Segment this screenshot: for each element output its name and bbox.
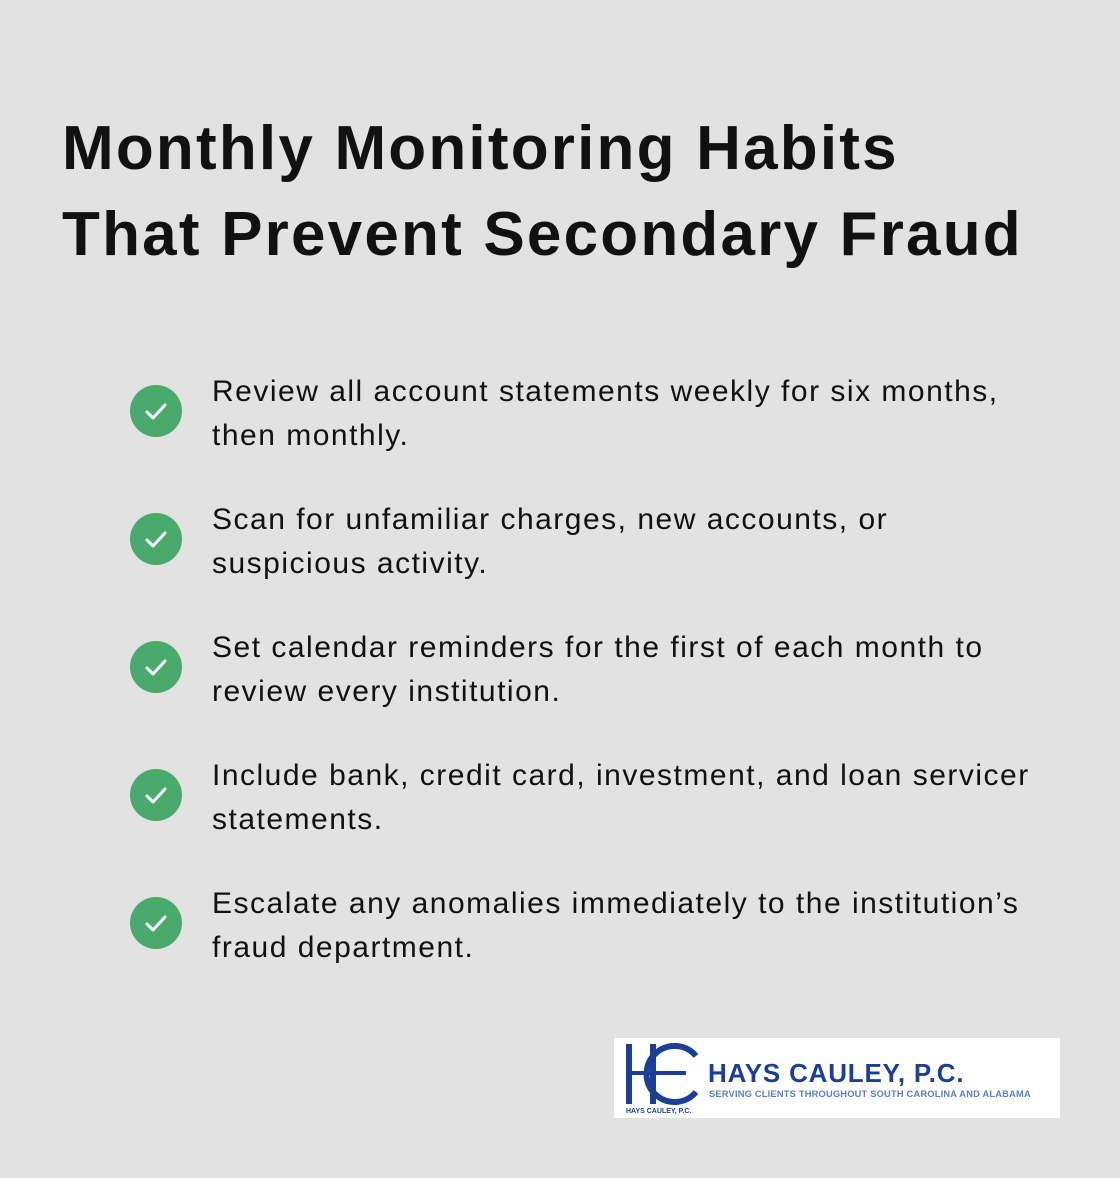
- text: [212, 759, 1030, 836]
- logo mark: [626, 1043, 698, 1105]
- icon: check: [130, 897, 182, 949]
- text: [212, 631, 984, 708]
- item 5: [130, 887, 1019, 964]
- item 3: [130, 631, 984, 708]
- title: Monthly Monitoring Habits: [62, 114, 899, 183]
- text: [212, 503, 888, 580]
- text: review every institution.: [212, 675, 561, 708]
- logo: HAYS CAULEY, P.C.: [626, 1108, 691, 1115]
- icon: check: [130, 641, 182, 693]
- text: Set calendar reminders for the first of each month to: [212, 631, 984, 664]
- text: statements.: [212, 803, 384, 836]
- icon: check: [130, 385, 182, 437]
- logo name: HAYS CAULEY, P.C.: [708, 1058, 964, 1088]
- text: Scan for unfamiliar charges, new accounts, or: [212, 503, 888, 536]
- item 2: [130, 503, 888, 580]
- logo: [614, 1038, 1060, 1118]
- text: fraud department.: [212, 931, 474, 964]
- text: [212, 375, 999, 452]
- text: Escalate any anomalies immediately to the institution’s: [212, 887, 1019, 920]
- logo tagline: SERVING CLIENTS THROUGHOUT SOUTH CAROLINA AND ALABAMA: [709, 1089, 1031, 1099]
- text: suspicious activity.: [212, 547, 488, 580]
- text: Review all account statements weekly for six months,: [212, 375, 999, 408]
- text: then monthly.: [212, 419, 409, 452]
- item 1: [130, 375, 999, 452]
- title: [62, 114, 1023, 269]
- text: [212, 887, 1019, 964]
- item 4: [130, 759, 1030, 836]
- icon: check: [130, 513, 182, 565]
- icon: check: [130, 769, 182, 821]
- text: Include bank, credit card, investment, and loan servicer: [212, 759, 1030, 792]
- title: That Prevent Secondary Fraud: [62, 200, 1023, 269]
